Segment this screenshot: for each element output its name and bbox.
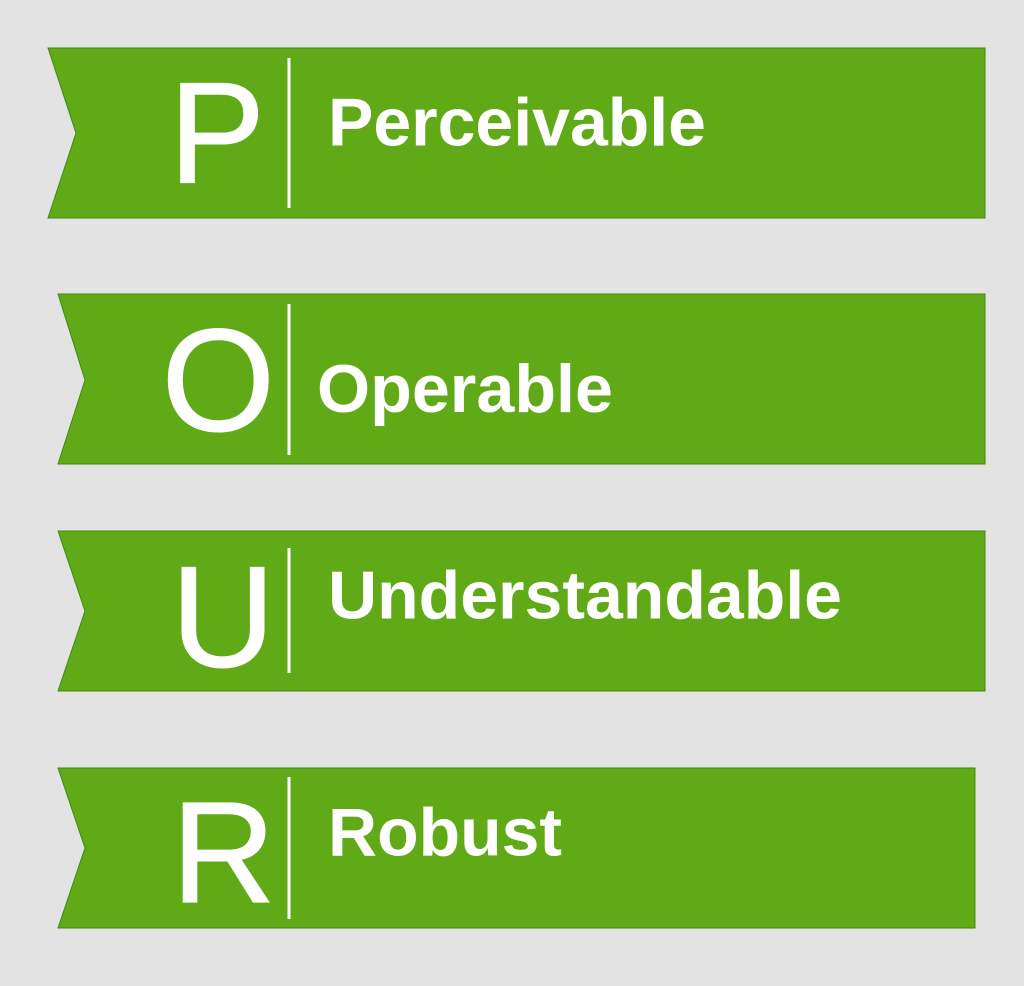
banner: Understandable	[58, 531, 985, 698]
label Robust: Robust	[328, 794, 562, 870]
letter O: O	[162, 298, 275, 462]
banner: Operable	[58, 294, 985, 464]
label Understandable: Understandable	[328, 558, 842, 634]
letter U: U	[171, 536, 275, 698]
banner: Perceivable	[48, 48, 985, 218]
label Operable: Operable	[317, 351, 613, 427]
letter P: P	[169, 52, 265, 214]
banner: Robust	[58, 768, 975, 933]
letter R: R	[172, 772, 276, 933]
label Perceivable: Perceivable	[328, 84, 706, 160]
